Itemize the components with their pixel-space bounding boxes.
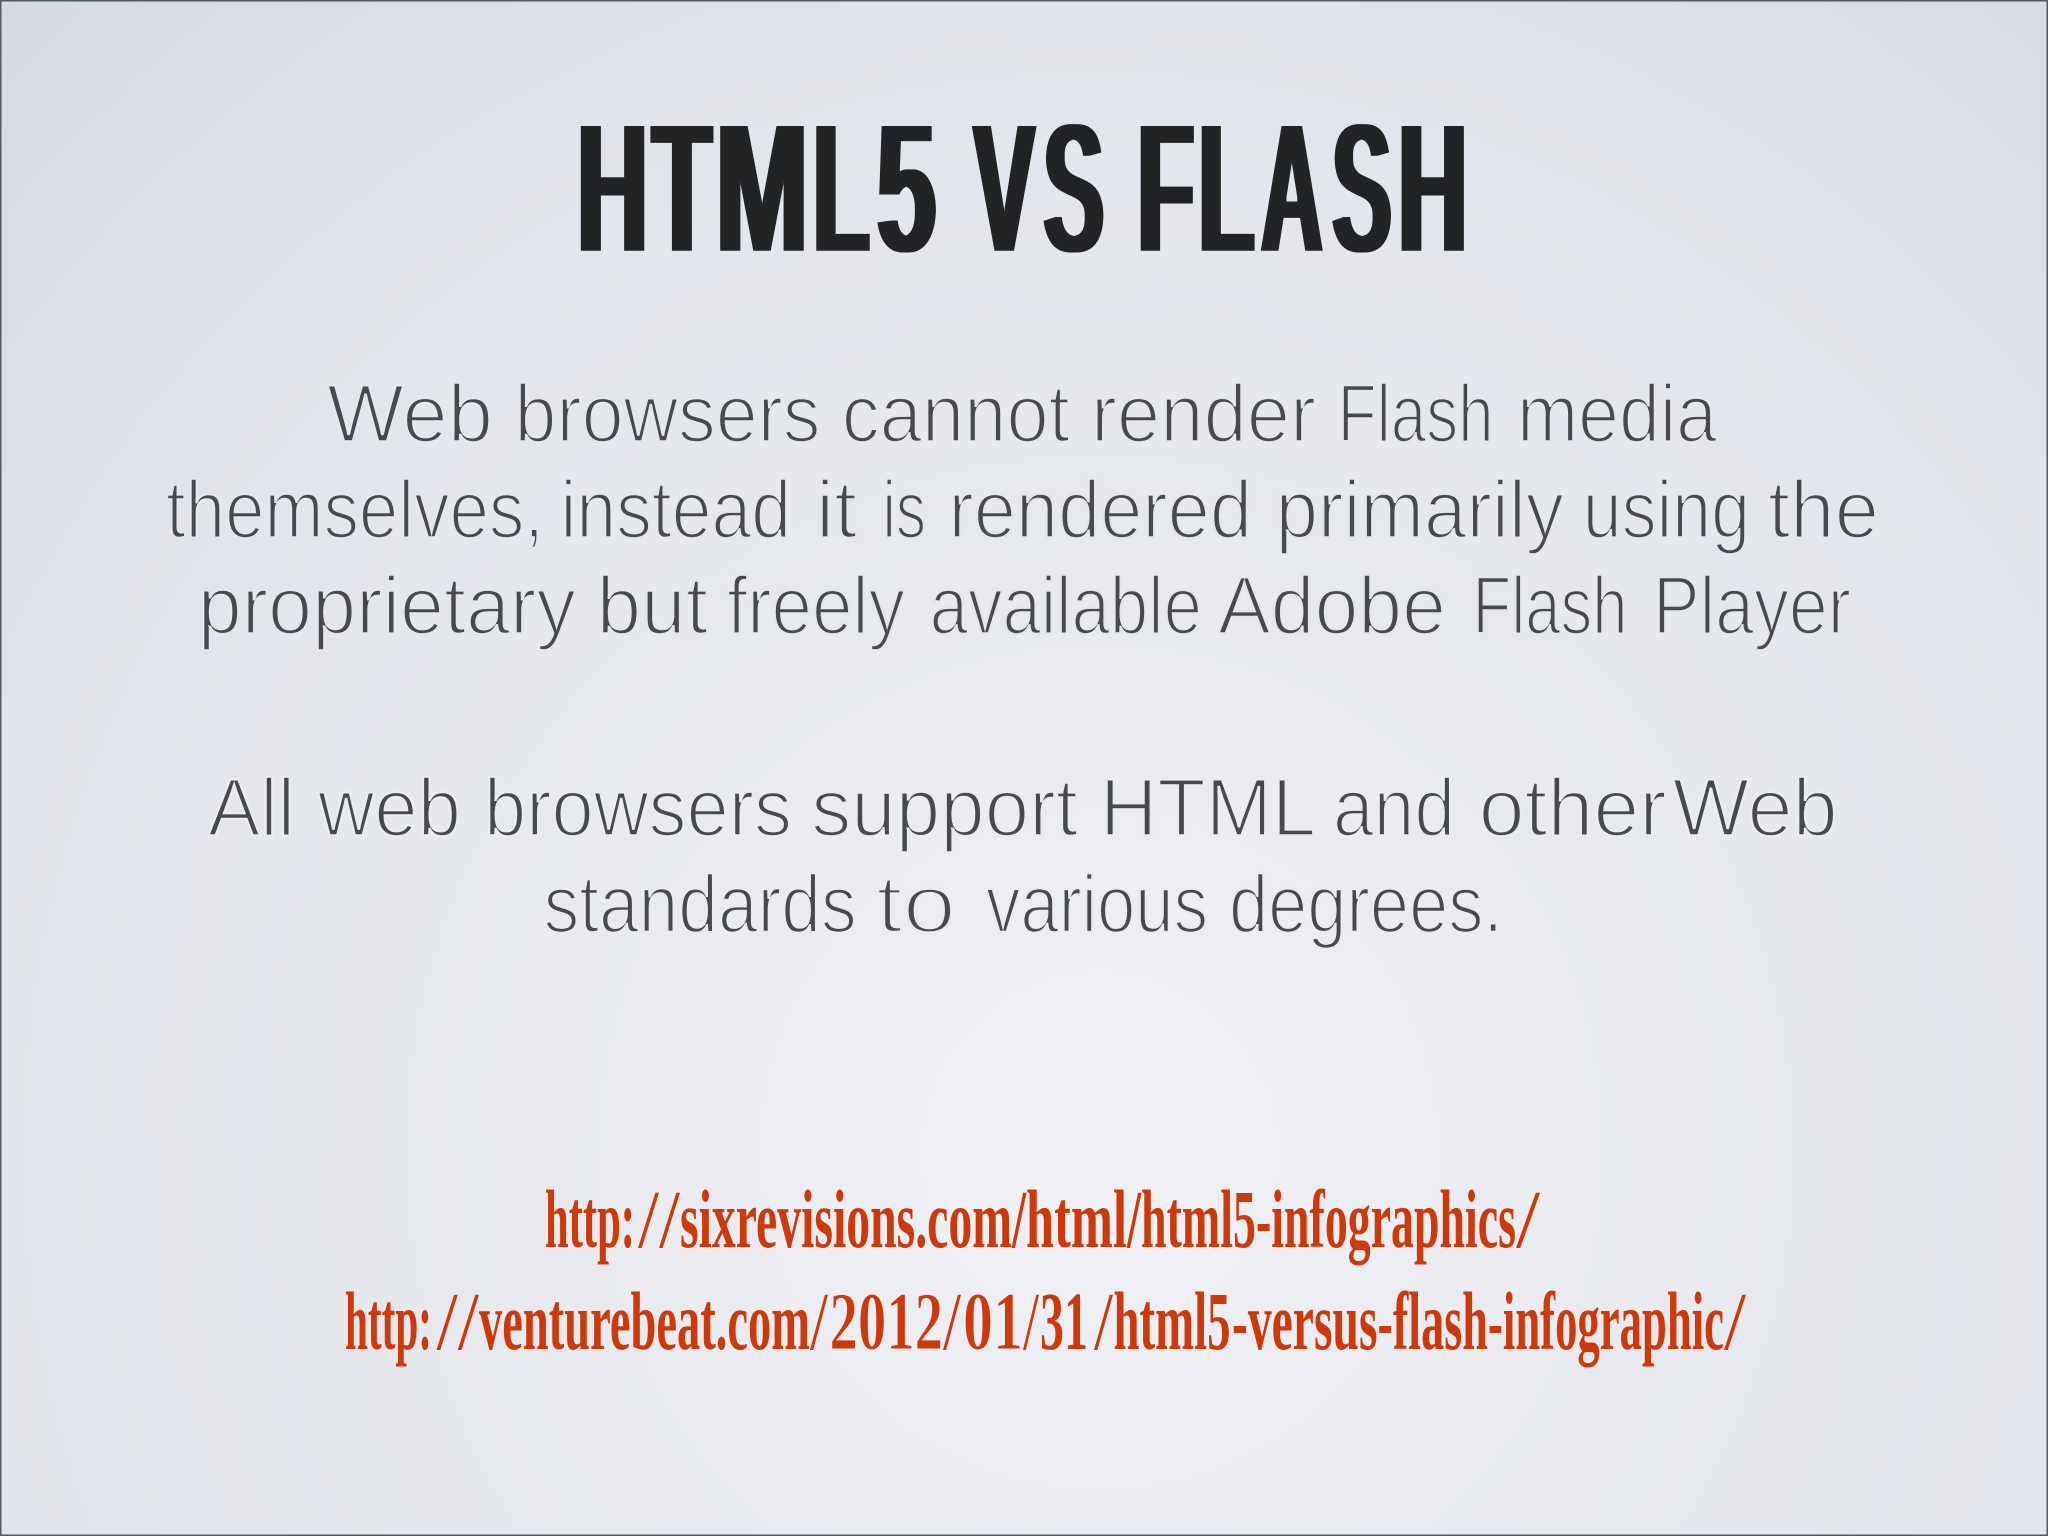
text block: Flash rendering: primarily — [1276, 464, 1564, 555]
title: L — [1199, 84, 1254, 293]
source links: / — [810, 1275, 829, 1367]
title: H — [577, 84, 648, 293]
text block: HTML support: HTML — [1100, 762, 1316, 853]
text block: HTML support: All — [208, 762, 295, 853]
title: A — [1261, 84, 1323, 293]
title: 5 — [877, 84, 936, 293]
source links: // — [638, 1173, 681, 1265]
text block: Flash rendering: using — [1583, 464, 1750, 555]
source links: html5 — [1141, 1173, 1256, 1265]
source links: / — [1724, 1275, 1747, 1367]
source links: http: — [345, 1275, 432, 1367]
text block: Flash rendering: it — [816, 464, 857, 555]
source links — [345, 1173, 1747, 1367]
text block: Flash rendering: proprietary — [198, 560, 576, 651]
title: H — [1398, 84, 1467, 293]
text block: HTML support: support — [811, 762, 1078, 853]
title: L — [813, 84, 870, 293]
source links: / — [1094, 1275, 1114, 1367]
source links: / — [1023, 1275, 1040, 1367]
source links: http: — [545, 1173, 635, 1265]
text block: HTML support: degrees. — [1229, 859, 1503, 950]
text block: HTML support: Web — [1673, 762, 1838, 853]
source links: / — [1516, 1173, 1541, 1265]
text block: Flash rendering: themselves, — [166, 464, 544, 555]
text block: HTML support: various — [986, 859, 1208, 950]
text block: HTML support — [208, 762, 1838, 950]
title: T — [652, 84, 712, 293]
text block: Flash rendering: Adobe — [1218, 560, 1446, 651]
source links: -infographic — [1488, 1275, 1724, 1367]
text block: Flash rendering: the — [1768, 464, 1879, 555]
source links: /html/ — [1011, 1173, 1142, 1265]
text block: Flash rendering: instead — [560, 464, 791, 555]
source links: / — [943, 1275, 962, 1367]
text block: Flash rendering: browsers — [514, 368, 820, 459]
source links: 01 — [963, 1275, 1023, 1367]
source links: -flash — [1378, 1275, 1488, 1367]
text block: Flash rendering: is — [882, 464, 926, 555]
text block: HTML support: browsers — [484, 762, 792, 853]
text block: HTML support: standards — [544, 859, 857, 950]
title: F — [1138, 84, 1194, 293]
source links: -versus — [1232, 1275, 1378, 1367]
source links: sixrevisions.com — [680, 1173, 1012, 1265]
text block: Flash rendering: available — [930, 560, 1202, 651]
text block: Flash rendering: Player — [1653, 560, 1851, 651]
title: S — [1332, 84, 1392, 293]
text block: HTML support: web — [317, 762, 461, 853]
title: V — [973, 84, 1035, 293]
source links: venturebeat.com — [479, 1275, 810, 1367]
title — [577, 84, 1467, 293]
text block: Flash rendering: media — [1517, 368, 1717, 459]
source links: // — [436, 1275, 480, 1367]
text block: Flash rendering: Flash — [1472, 560, 1628, 651]
source links: html5 — [1114, 1275, 1230, 1367]
text block: Flash rendering: render — [1091, 368, 1316, 459]
source links: -infographics — [1256, 1173, 1516, 1265]
text block: Flash rendering: Flash — [1338, 368, 1494, 459]
source links: 31 — [1040, 1275, 1088, 1367]
text block: Flash rendering: Web — [327, 368, 493, 459]
text block: HTML support: to — [876, 859, 956, 950]
text block: Flash rendering: rendered — [948, 464, 1252, 555]
source links: 2012 — [830, 1275, 943, 1367]
text block: HTML support: and — [1333, 762, 1455, 853]
text block: Flash rendering — [166, 368, 1879, 651]
title: S — [1043, 84, 1104, 293]
text block: Flash rendering: but — [597, 560, 708, 651]
title: M — [716, 84, 808, 293]
text block: HTML support: other — [1479, 762, 1667, 853]
text block: Flash rendering: cannot — [842, 368, 1070, 459]
text block: Flash rendering: freely — [727, 560, 905, 651]
